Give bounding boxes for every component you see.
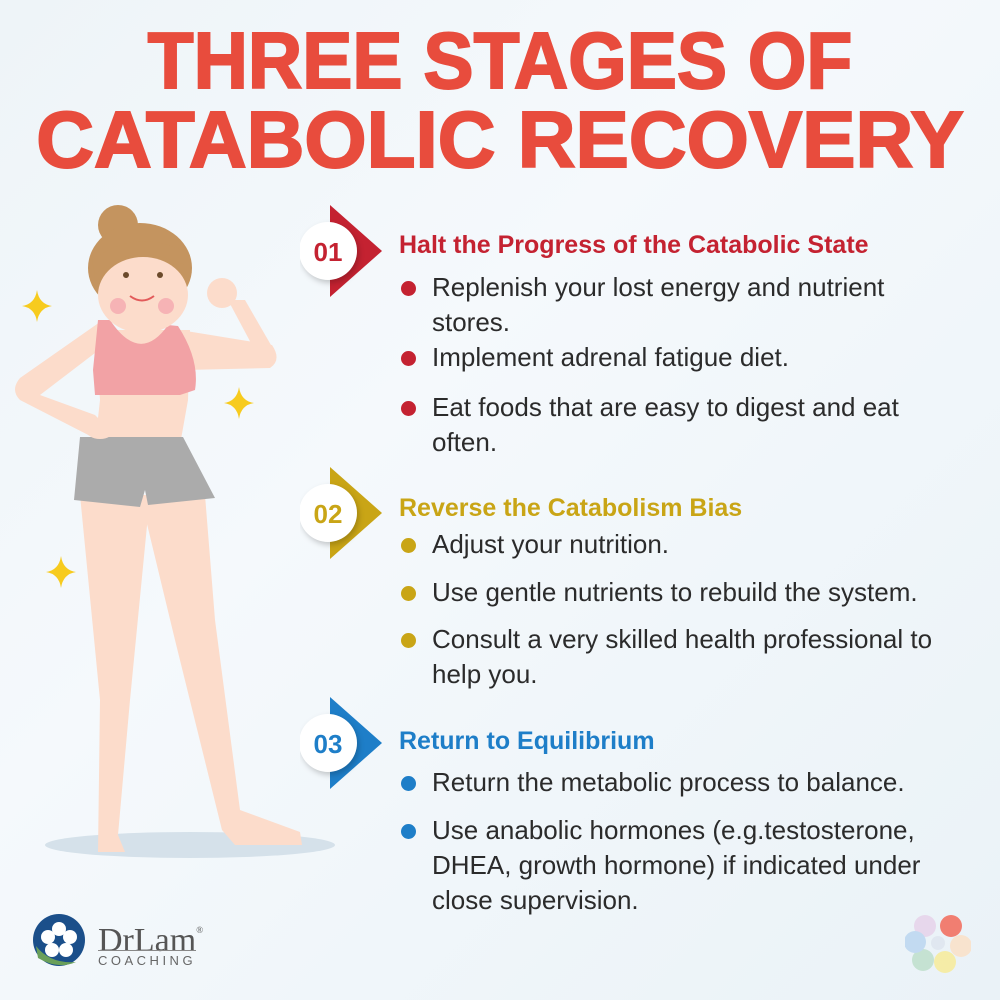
panel: stage 03: Use anabolic hormones (e.g.testosterone, DHEA, growth hormone) if indicated under close supervision. <box>432 815 920 915</box>
logo: DrLam Coaching <box>33 914 203 968</box>
panel: stage 01: Implement adrenal fatigue diet. <box>432 342 789 372</box>
icon: sparkle 3 <box>46 556 76 588</box>
badge 02: 02 <box>314 499 342 529</box>
heading 02: Reverse the Catabolism Bias <box>399 494 742 522</box>
panel: stage 01: Eat foods that are easy to digest and eat often. <box>432 392 899 457</box>
icon: sparkle 1 <box>22 290 52 322</box>
badge 02 <box>300 467 382 559</box>
title: CATABOLIC RECOVERY <box>36 95 964 184</box>
panel: stage 02: Use gentle nutrients to rebuild the system. <box>432 577 918 607</box>
panel: stage 03 <box>300 697 920 915</box>
badge 01: 01 <box>314 237 342 267</box>
logo: DrLam Coaching: COACHING <box>98 953 196 968</box>
panel: stage 01 <box>300 205 899 457</box>
badge 03: 03 <box>314 729 342 759</box>
title: THREE STAGES OF <box>148 16 852 105</box>
heading 01: Halt the Progress of the Catabolic State <box>399 231 869 259</box>
badge 01 <box>300 205 382 297</box>
icon: flower logo <box>905 915 971 973</box>
panel: stage 02: Consult a very skilled health professional to help you. <box>432 624 932 689</box>
illustration: woman flexing <box>15 205 335 858</box>
icon: sparkle 2 <box>224 387 254 419</box>
bullets 02: Adjust your nutrition. <box>432 529 669 559</box>
heading 03: Return to Equilibrium <box>399 727 655 755</box>
badge 03 <box>300 697 382 789</box>
title <box>36 16 964 184</box>
panel: stage 02 <box>300 467 932 689</box>
logo: DrLam Coaching: DrLam® <box>98 922 203 959</box>
bullets 03: Return the metabolic process to balance. <box>432 767 905 797</box>
bullets 01: Replenish your lost energy and nutrient stores. <box>432 272 884 337</box>
